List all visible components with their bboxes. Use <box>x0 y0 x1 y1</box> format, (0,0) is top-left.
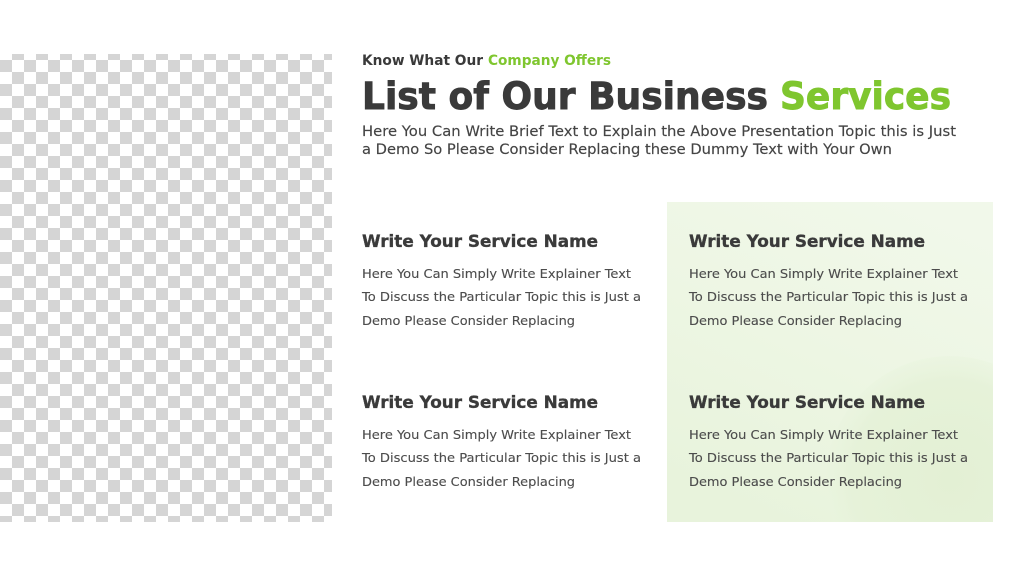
service: top left: Here You Can Simply Write Explainer Text <box>362 266 631 281</box>
service: top right: Write Your Service Name <box>689 232 925 252</box>
eyebrow heading <box>362 53 611 69</box>
intro text block: Here You Can Write Brief Text to Explain the Above Presentation Topic this is Just <box>362 124 956 140</box>
service: bottom right <box>688 393 968 489</box>
eyebrow heading: Know What Our <box>362 53 483 69</box>
service: bottom right: Write Your Service Name <box>689 393 925 413</box>
eyebrow heading: Company Offers <box>488 53 611 69</box>
service: bottom left <box>361 393 641 489</box>
title: Services <box>780 75 951 118</box>
service: top right <box>688 232 968 328</box>
service: top left: Write Your Service Name <box>362 232 598 252</box>
service: top left: To Discuss the Particular Topic this is Just a <box>361 289 641 304</box>
image placeholder: transparency checkerboard <box>0 54 332 522</box>
title: List of Our Business <box>362 75 768 118</box>
service: top right: Here You Can Simply Write Explainer Text <box>689 266 958 281</box>
intro text block: a Demo So Please Consider Replacing these Dummy Text with Your Own <box>362 142 892 158</box>
service: top right: To Discuss the Particular Topic this is Just a <box>688 289 968 304</box>
service: bottom left: To Discuss the Particular Topic this is Just a <box>361 450 641 465</box>
service: bottom right: Here You Can Simply Write Explainer Text <box>689 427 958 442</box>
panel: green highlight background <box>667 202 993 522</box>
service: bottom right: To Discuss the Particular Topic this is Just a <box>688 450 968 465</box>
intro text block <box>362 124 956 158</box>
service: bottom right: Demo Please Consider Replacing <box>689 474 902 489</box>
service: top left <box>361 232 641 328</box>
service: top left: Demo Please Consider Replacing <box>362 313 575 328</box>
service: bottom left: Here You Can Simply Write Explainer Text <box>362 427 631 442</box>
service: bottom left: Write Your Service Name <box>362 393 598 413</box>
service: top right: Demo Please Consider Replacing <box>689 313 902 328</box>
service: bottom left: Demo Please Consider Replacing <box>362 474 575 489</box>
